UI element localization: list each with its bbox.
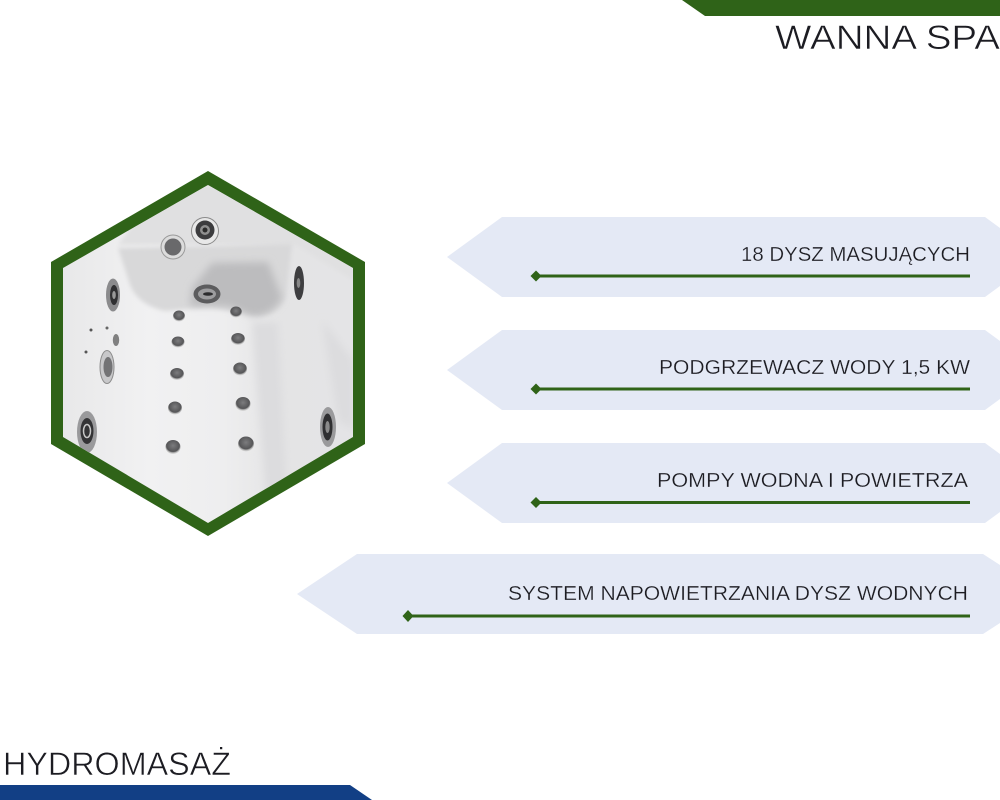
banner text: 18 DYSZ MASUJĄCYCH [741, 244, 970, 266]
jets: right column [230, 306, 254, 452]
top green bar [682, 0, 1000, 16]
banner shape [297, 554, 1000, 634]
banner text: POMPY WODNA I POWIETRZA [657, 470, 969, 492]
banner text: SYSTEM NAPOWIETRZANIA DYSZ WODNYCH [508, 583, 968, 605]
top round jet [192, 218, 218, 244]
bottom blue bar [0, 785, 372, 800]
left lower side jet [77, 411, 97, 453]
grille jet [161, 235, 185, 259]
banner leader line [530, 270, 970, 282]
hexagon green frame [51, 171, 365, 536]
right upper side jet [294, 266, 304, 300]
banner shape [447, 217, 1000, 297]
left upper side jet [106, 278, 120, 312]
subtitle: HYDROMASAŻ: HYDROMASAŻ [3, 746, 231, 782]
jets: left column [166, 310, 185, 454]
banner leader line [530, 384, 970, 394]
centre jet [194, 284, 220, 304]
left grille and small fittings [84, 326, 119, 384]
feature banner 3 [447, 443, 1000, 523]
feature banner 1 [447, 217, 1000, 297]
banner leader line [530, 497, 970, 508]
feature banner 4 [297, 554, 1000, 634]
banner leader line [402, 610, 970, 622]
banner shape [447, 330, 1000, 410]
bathtub interior photo [60, 180, 356, 526]
banner text: PODGRZEWACZ WODY 1,5 KW [659, 357, 970, 379]
right lower side jet [320, 407, 336, 447]
banner shape [447, 443, 1000, 523]
feature banner 2 [447, 330, 1000, 410]
hexagon photo of spa bathtub [51, 171, 365, 536]
title: WANNA SPA: WANNA SPA [775, 19, 1000, 57]
